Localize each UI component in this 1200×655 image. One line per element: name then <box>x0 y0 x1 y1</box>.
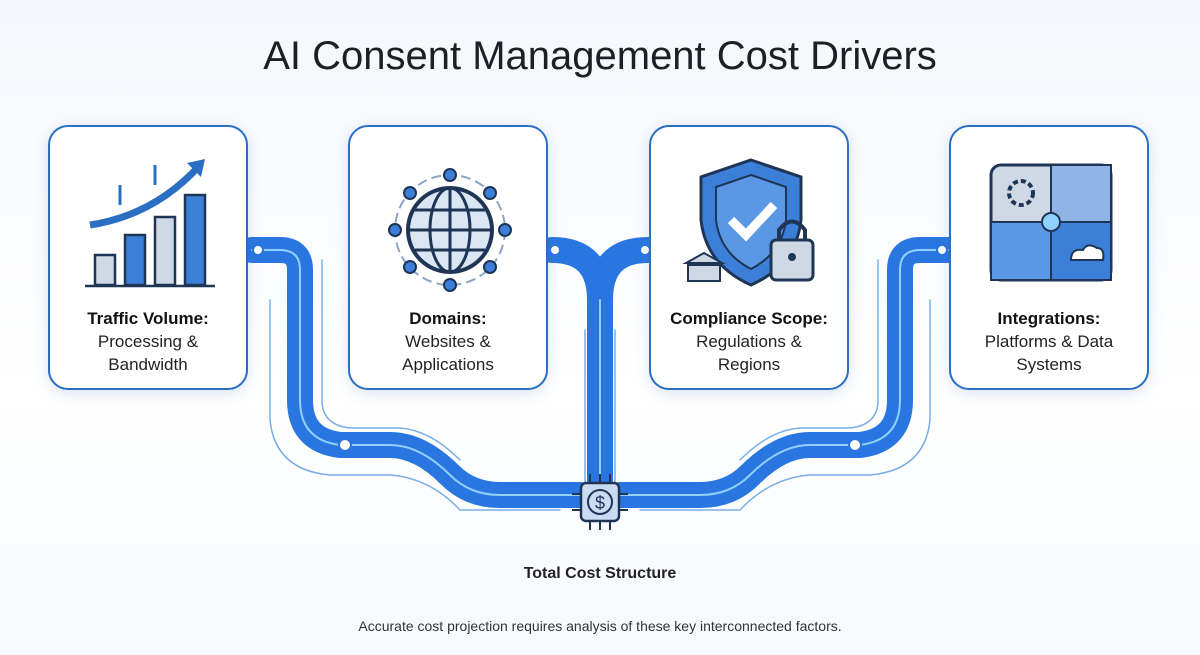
icon: shield lock <box>682 158 814 287</box>
label: Compliance Scope: <box>670 309 828 328</box>
label: Websites & <box>405 332 491 351</box>
label: Domains: <box>409 309 487 328</box>
icon: chip dollar: $ <box>595 493 605 513</box>
card: integrations <box>949 125 1149 390</box>
title: AI Consent Management Cost Drivers <box>263 34 937 78</box>
label: Platforms & Data <box>985 332 1113 351</box>
label <box>670 309 828 374</box>
label: Regulations & <box>696 332 802 351</box>
label: Systems <box>1016 355 1082 374</box>
label: Integrations: <box>998 309 1100 328</box>
label: Processing & <box>98 332 198 351</box>
icon: globe <box>388 168 512 292</box>
label: Bandwidth <box>108 355 188 374</box>
card: compliance <box>649 125 849 390</box>
icon: puzzle <box>990 164 1112 282</box>
label: Applications <box>402 355 494 374</box>
label <box>402 309 494 374</box>
label: Traffic Volume: <box>87 309 209 328</box>
total label: Total Cost Structure <box>524 565 676 582</box>
card: domains <box>348 125 548 390</box>
label <box>985 309 1114 374</box>
icon: chip dollar <box>572 474 628 530</box>
icon: bar chart <box>85 159 215 288</box>
card: traffic volume <box>48 125 248 390</box>
label: Regions <box>718 355 780 374</box>
footer: Accurate cost projection requires analysis of these key interconnected factors. <box>358 618 842 634</box>
label <box>87 309 209 374</box>
